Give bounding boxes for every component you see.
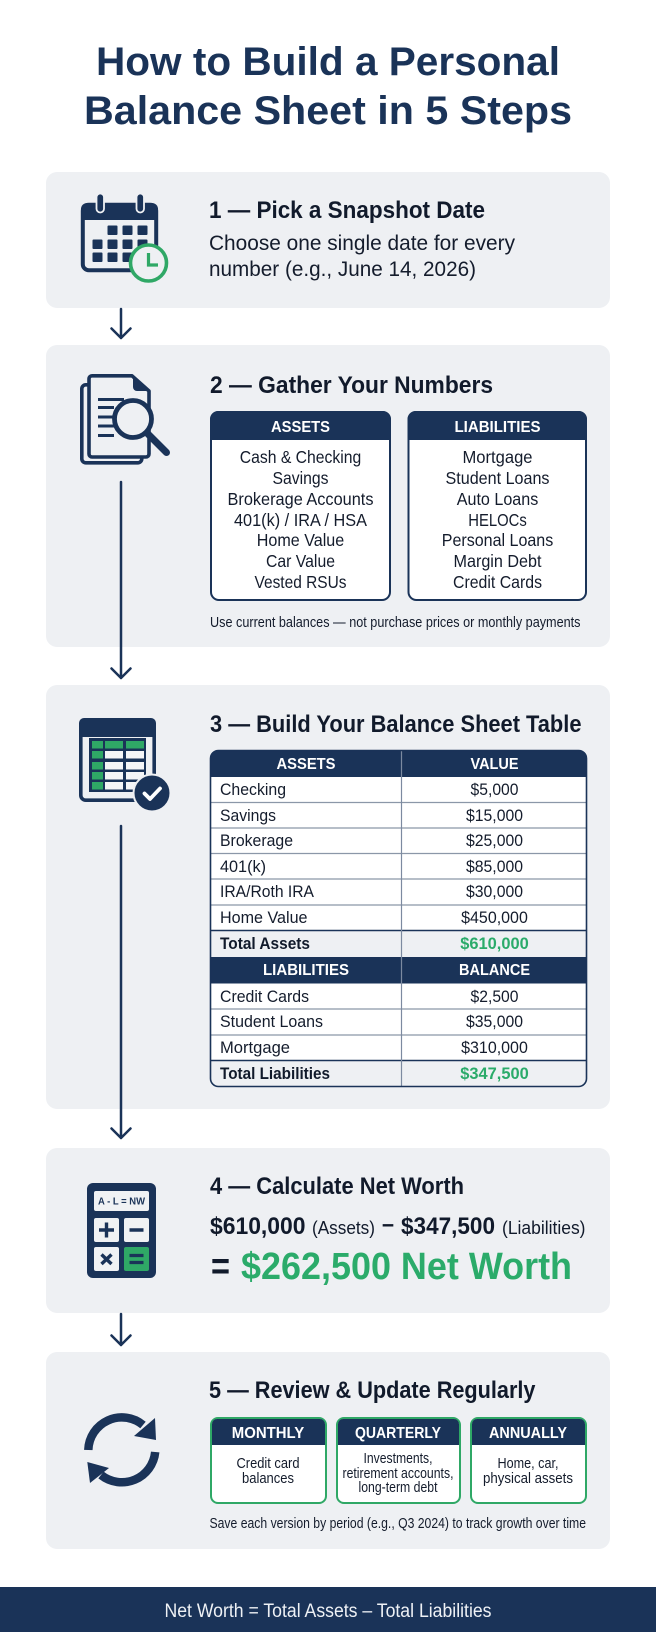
table header: liabilities and balance [263,962,530,979]
result: net worth: $262,500 Net Worth [241,1246,572,1288]
table rows: assets: $85,000 [466,857,523,876]
panel: step 3 build your balance sheet table [46,685,610,1109]
table rows: assets: $15,000 [466,806,523,825]
table row: total liabilities [220,1064,529,1083]
table rows: assets: Home Value [220,908,308,927]
card: assets: Vested RSUs [254,572,347,592]
table rows: assets: IRA/Roth IRA [220,882,315,901]
table header: assets and value: ASSETS [276,756,336,773]
equation: assets minus liabilities: $347,500 [401,1213,495,1240]
table header: liabilities and balance: LIABILITIES [263,962,349,979]
table rows: assets: Savings [220,806,276,825]
table: balance sheet [210,750,587,1087]
panel: step 1 pick a snapshot date [46,172,610,308]
card: annually: physical assets [483,1471,573,1487]
card: liabilities: Auto Loans [457,489,538,509]
table rows: assets [220,780,528,927]
heading: step 4: 4 — Calculate Net Worth [210,1173,464,1200]
footer banner: net worth formula [0,1587,656,1632]
table rows: assets: Checking [220,780,286,799]
card: quarterly [337,1418,460,1503]
table rows: assets: $450,000 [461,908,528,927]
result: net worth: = [211,1246,230,1288]
icon: refresh arrows [87,1417,156,1483]
table rows: liabilities: Credit Cards [220,987,309,1006]
heading: step 5: 5 — Review & Update Regularly [209,1377,536,1404]
text: step 1 body [209,231,515,281]
equation: assets minus liabilities: (Liabilities) [502,1218,586,1238]
card: monthly: MONTHLY [232,1425,305,1442]
table header: liabilities and balance: BALANCE [459,962,530,979]
card: assets: ASSETS [271,419,330,436]
table row: total assets: $610,000 [460,934,529,953]
heading: step 2: 2 — Gather Your Numbers [210,372,493,399]
arrow: step 4 to 5 [112,1314,130,1345]
arrow: step 1 to 2 [112,309,130,338]
card: monthly [211,1418,326,1503]
card: annually: ANNUALLY [489,1425,567,1442]
panel: step 4 calculate net worth [46,1148,610,1313]
equation: assets minus liabilities [210,1211,586,1240]
card: monthly: balances [242,1471,294,1487]
card: liabilities: Mortgage [462,447,532,467]
text: step 1 body: Choose one single date for every [209,231,515,255]
card: liabilities: Student Loans [446,468,550,488]
card: quarterly: long-term debt [358,1480,438,1496]
table row: total liabilities: $347,500 [460,1064,529,1083]
icon: spreadsheet with check badge [79,718,170,812]
table rows: liabilities: Student Loans [220,1012,323,1031]
card: liabilities: LIABILITIES [454,419,541,436]
equation: assets minus liabilities: $610,000 [210,1213,306,1240]
table rows: liabilities: $310,000 [461,1038,528,1057]
table header: assets and value: VALUE [470,756,519,773]
card: liabilities: Margin Debt [454,551,542,571]
arrow: step 2 to 3 [112,482,130,678]
icon: calculator [87,1183,156,1278]
card: quarterly: Investments, [364,1451,432,1467]
note: save each version: Save each version by period (e.g., Q3 2024) to track growth over time [210,1516,586,1532]
card: assets: 401(k) / IRA / HSA [234,510,367,530]
card: assets: Cash & Checking [240,447,361,467]
card: quarterly: retirement accounts, [342,1466,454,1482]
table row: total assets [220,934,529,953]
card: liabilities: Personal Loans [442,530,553,550]
table rows: liabilities: Mortgage [220,1038,290,1057]
arrow: step 3 to 4 [112,826,130,1138]
note: use current balances: Use current balances — not purchase prices or monthly payments [210,615,580,631]
card: assets: Brokerage Accounts [228,489,374,509]
table rows: liabilities: $35,000 [466,1012,523,1031]
text: step 1 body: number (e.g., June 14, 2026) [209,257,476,281]
panel: step 5 review and update regularly [46,1352,610,1549]
table rows: assets: $30,000 [466,882,523,901]
table rows: assets: $25,000 [466,831,523,850]
card: quarterly: QUARTERLY [355,1425,441,1442]
table rows: liabilities: $2,500 [470,987,518,1006]
card: assets: Savings [272,468,329,488]
heading: step 1: 1 — Pick a Snapshot Date [209,197,485,224]
table row: total liabilities: Total Liabilities [220,1064,330,1083]
table rows: assets: Brokerage [220,831,293,850]
panel: step 2 gather your numbers [46,345,610,647]
footer banner: net worth formula: Net Worth = Total Assets – Total Liabilities [164,1601,492,1622]
icon: calendar with clock [81,194,166,281]
card: liabilities: Credit Cards [453,572,542,592]
icon: calculator: A - L = NW [98,1196,145,1208]
table rows: assets: 401(k) [220,857,266,876]
table header: assets and value [276,756,519,773]
table rows: liabilities [220,987,528,1057]
card: liabilities: HELOCs [468,510,527,530]
table rows: assets: $5,000 [470,780,518,799]
icon: documents with magnifier [82,375,166,463]
card: assets: Home Value [257,530,344,550]
card: assets [210,411,391,600]
card: liabilities [408,411,587,600]
card: annually: Home, car, [498,1456,558,1472]
card: monthly: Credit card [236,1456,300,1472]
title [84,40,572,133]
title: Balance Sheet in 5 Steps [84,89,572,133]
equation: assets minus liabilities: (Assets) [312,1218,375,1238]
card: assets: Car Value [266,551,335,571]
table row: total assets: Total Assets [220,934,310,953]
title: How to Build a Personal [96,40,560,84]
equation: assets minus liabilities: – [382,1211,394,1238]
heading: step 3: 3 — Build Your Balance Sheet Table [210,711,582,738]
card: annually [471,1418,586,1503]
